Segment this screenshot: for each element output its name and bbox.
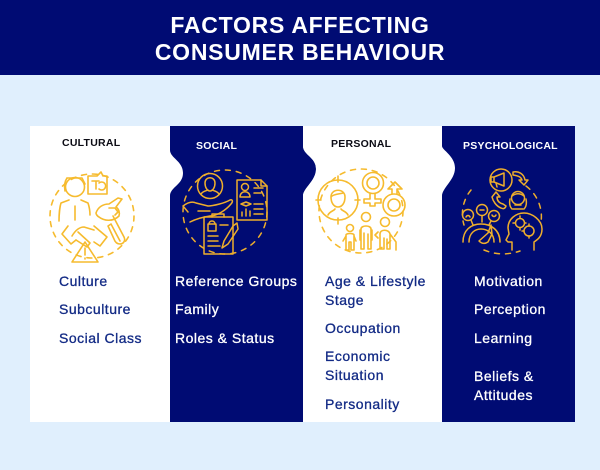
list: personal factors: Personality bbox=[325, 396, 400, 412]
title bbox=[155, 12, 445, 64]
list: cultural factors bbox=[59, 273, 142, 346]
panel: personal bbox=[303, 126, 455, 422]
panel: social bbox=[170, 126, 316, 422]
icon: demographics bbox=[316, 169, 405, 253]
list: psychological factors: Beliefs & bbox=[474, 368, 534, 384]
list: cultural factors: Subculture bbox=[59, 301, 131, 317]
list: personal factors: Economic bbox=[325, 348, 390, 364]
title: FACTORS AFFECTING bbox=[170, 12, 430, 38]
heading: personal: PERSONAL bbox=[331, 138, 392, 150]
list: social factors: Reference Groups bbox=[175, 273, 297, 289]
list: social factors: Family bbox=[175, 301, 219, 317]
list: personal factors: Occupation bbox=[325, 320, 401, 336]
list: cultural factors: Culture bbox=[59, 273, 108, 289]
list: social factors: Roles & Status bbox=[175, 330, 275, 346]
list: personal factors: Age & Lifestyle bbox=[325, 273, 426, 289]
title: CONSUMER BEHAVIOUR bbox=[155, 38, 445, 64]
list: personal factors: Stage bbox=[325, 292, 364, 308]
heading: psychological: PSYCHOLOGICAL bbox=[463, 140, 558, 152]
panel: psychological bbox=[442, 126, 575, 422]
list: psychological factors: Motivation bbox=[474, 273, 543, 289]
icon: psychology bbox=[462, 169, 542, 254]
panel: cultural bbox=[30, 126, 183, 422]
list: cultural factors: Social Class bbox=[59, 330, 142, 346]
list: psychological factors bbox=[474, 273, 546, 403]
icon: social documents bbox=[183, 170, 267, 254]
list: personal factors bbox=[325, 273, 426, 412]
list: social factors bbox=[175, 273, 297, 346]
heading: social: SOCIAL bbox=[196, 140, 238, 152]
icon: culture symbols bbox=[50, 172, 134, 262]
list: psychological factors: Perception bbox=[474, 301, 546, 317]
header band bbox=[0, 0, 600, 75]
list: psychological factors: Learning bbox=[474, 330, 532, 346]
list: personal factors: Situation bbox=[325, 367, 384, 383]
heading: cultural: CULTURAL bbox=[62, 137, 121, 149]
list: psychological factors: Attitudes bbox=[474, 387, 533, 403]
